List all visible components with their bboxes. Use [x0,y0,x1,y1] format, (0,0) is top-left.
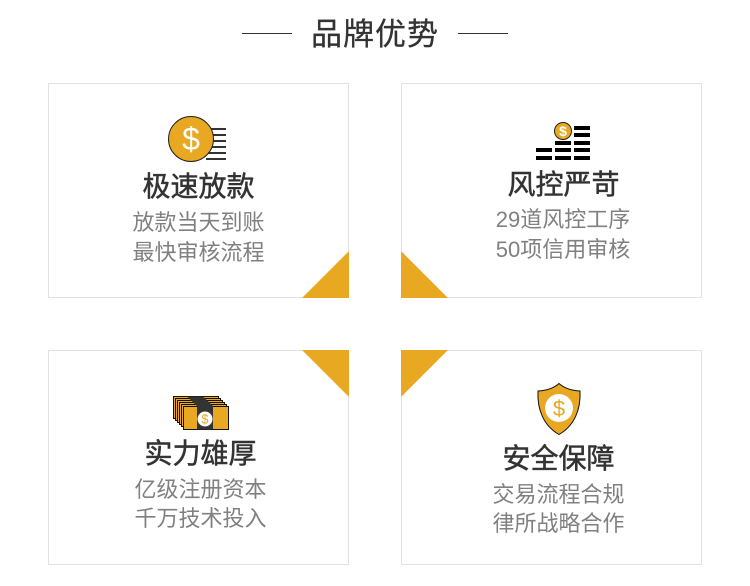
heading: 极速放款 [142,171,254,202]
icon: shield with dollar [538,382,580,436]
icon: coin on stacked bars: $ [559,123,567,139]
icon: stack of banknotes: $ [202,412,209,426]
heading: 风控严苛 [507,169,620,200]
text block: 最快审核流程 [132,240,264,265]
corner triangle [302,350,349,397]
corner triangle [401,251,448,298]
icon: dollar coin with speed lines [168,116,226,162]
panel: 极速放款 [48,83,349,298]
heading: 实力雄厚 [144,438,256,469]
panel: 风控严苛 [401,83,702,298]
text block: 50项信用审核 [496,237,630,262]
icon: shield with dollar: $ [553,396,565,421]
icon: stack of banknotes [173,396,229,430]
heading: 安全保障 [502,443,614,474]
text block: 放款当天到账 [132,210,264,235]
icon: dollar coin with speed lines: $ [182,121,200,157]
text block: 律所战略合作 [492,511,624,536]
icon: coin on stacked bars [536,122,590,160]
text block [132,210,264,265]
title: 品牌优势 [311,17,439,52]
text block: 亿级注册资本 [134,477,266,502]
text block [492,482,624,536]
text block: 29道风控工序 [496,207,630,232]
panel: 实力雄厚 [48,350,349,565]
panel: 安全保障 [401,350,702,565]
corner triangle [401,350,448,397]
corner triangle [302,251,349,298]
text block: 千万技术投入 [134,506,266,531]
text block: 交易流程合规 [492,482,624,507]
text block [134,477,266,531]
text block [496,207,630,262]
